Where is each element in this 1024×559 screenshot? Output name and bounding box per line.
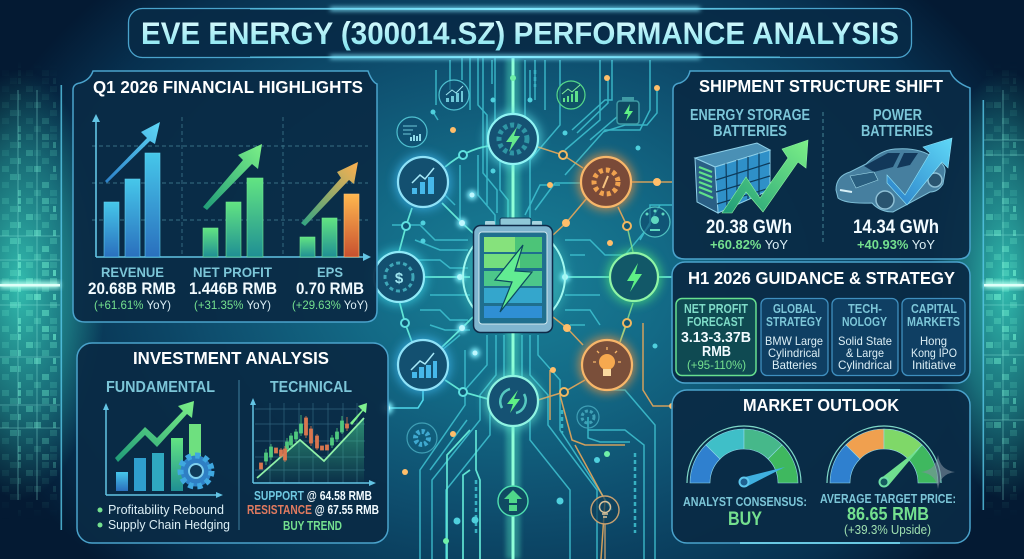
card: technology: & Large [846, 346, 884, 360]
card: net profit forecast: 3.13-3.37B [681, 330, 751, 346]
metric: revenue [88, 264, 176, 312]
label: power batteries: POWER [873, 107, 922, 124]
card: net profit forecast: RMB [702, 344, 731, 360]
label: energy storage batteries: BATTERIES [713, 123, 787, 140]
label: power batteries: BATTERIES [861, 123, 933, 140]
center node: upper-left growth chart [395, 154, 451, 210]
card: net profit forecast [676, 298, 756, 376]
heading: INVESTMENT ANALYSIS [133, 348, 329, 368]
label: analyst consensus [683, 495, 807, 530]
central vertical energy line [506, 58, 520, 559]
chart: grid and axes [92, 114, 371, 261]
panel: shipment structure shift [673, 71, 970, 259]
technical levels: SUPPORT @ 64.58 RMB [254, 489, 372, 503]
card: net profit forecast: (+95-110%) [687, 360, 746, 372]
background: right data strip [930, 60, 1024, 520]
metric: power batteries [853, 217, 939, 252]
junction dots [381, 75, 675, 544]
icon: report [397, 117, 427, 147]
center node: green bolt [607, 250, 661, 304]
subheading: fundamental: FUNDAMENTAL [106, 379, 215, 396]
center node: recycle bolt [485, 373, 541, 429]
technical levels: BUY TREND [283, 519, 342, 533]
center node: top energy gear [485, 111, 541, 167]
center node: orange gear [578, 154, 634, 210]
label: average target price: AVERAGE TARGET PRICE: [820, 492, 956, 506]
metric: revenue: 20.68B RMB [88, 279, 176, 298]
chart: fundamental growth [103, 401, 223, 498]
card: capital markets: Kong IPO [911, 346, 957, 360]
card: technology [832, 298, 898, 376]
center node: lower-left growth chart [395, 337, 451, 393]
card: capital markets [902, 298, 965, 376]
card: capital markets: CAPITAL [911, 302, 957, 316]
small icons around the circuit [397, 80, 670, 559]
card: capital markets: MARKETS [907, 315, 960, 329]
icon: ring gear [577, 406, 599, 428]
gauge: average target price [827, 426, 955, 489]
heading: H1 2026 GUIDANCE & STRATEGY [688, 268, 955, 288]
gauge: analyst consensus [687, 426, 801, 487]
bullet list: Supply Chain Hedging [108, 517, 230, 532]
icon: battery [617, 97, 639, 124]
card: capital markets: Initiative [912, 358, 956, 372]
icon: growth chart [439, 80, 469, 110]
label: average target price: (+39.3% Upside) [844, 523, 931, 537]
center node: light bulb [579, 337, 635, 393]
chart: technical candlestick [250, 398, 376, 486]
icon: green chart [557, 81, 585, 109]
background: left data strip [0, 60, 105, 530]
metric: revenue: (+61.61% YoY) [94, 298, 171, 312]
title bar: EVE ENERGY (300014.SZ) PERFORMANCE ANALYSIS [141, 15, 899, 51]
center node: dollar gear [371, 249, 427, 305]
card: technology: NOLOGY [842, 315, 888, 329]
label: average target price [820, 492, 956, 537]
bullet list [98, 502, 230, 532]
metric: power batteries: 14.34 GWh [853, 217, 939, 238]
metric: EPS: (+29.63% YoY) [292, 298, 368, 312]
card: global strategy: BMW Large [765, 334, 823, 348]
heading: Q1 2026 FINANCIAL HIGHLIGHTS [93, 77, 363, 97]
metric: net profit: (+31.35% YoY) [194, 298, 271, 312]
heading: MARKET OUTLOOK [743, 395, 899, 415]
sparkle mark [921, 455, 955, 489]
panel: H1 2026 guidance and strategy [672, 262, 970, 383]
technical levels [247, 489, 379, 533]
card: global strategy: STRATEGY [766, 315, 823, 329]
label: average target price: 86.65 RMB [847, 504, 929, 524]
metric: EPS [292, 264, 368, 312]
title bar [128, 8, 912, 58]
central battery [460, 218, 568, 332]
heading: SHIPMENT STRUCTURE SHIFT [699, 76, 943, 96]
icon: gear [407, 423, 437, 453]
icon: home arrow [498, 486, 528, 516]
center node: dollar gear: $ [395, 270, 404, 287]
central circuit traces [387, 58, 672, 559]
panel: Q1 2026 financial highlights [73, 71, 377, 322]
icon: electric car and blue arrow [836, 138, 952, 212]
bullet list: Profitability Rebound [108, 502, 224, 517]
card: global strategy: Cylindrical [768, 346, 820, 360]
card: technology: TECH- [848, 302, 882, 316]
card: global strategy [761, 298, 828, 376]
card: global strategy: GLOBAL [773, 302, 816, 316]
bar chart: EPS [300, 162, 359, 257]
metric: revenue: REVENUE [101, 264, 164, 280]
card: capital markets: Hong [920, 334, 947, 348]
label: analyst consensus: BUY [728, 509, 762, 530]
icon: storage container and green arrow [695, 140, 808, 213]
panel: market outlook [672, 390, 970, 543]
metric: energy storage [706, 217, 792, 252]
bar chart: revenue [104, 122, 160, 257]
card: net profit forecast: NET PROFIT [684, 302, 748, 316]
metric: energy storage: +60.82% YoY [710, 237, 788, 252]
metric: net profit: 1.446B RMB [189, 279, 277, 298]
label: energy storage batteries: ENERGY STORAGE [690, 107, 810, 124]
metric: energy storage: 20.38 GWh [706, 217, 792, 238]
bar chart: net profit [203, 144, 263, 257]
metric: EPS: EPS [317, 264, 343, 280]
icon: idea cluster [640, 207, 670, 237]
subheading: technical: TECHNICAL [270, 379, 352, 396]
card: technology: Cylindrical [838, 358, 892, 372]
icon: gear [180, 456, 212, 486]
icon: outline bulb [591, 496, 619, 559]
card: net profit forecast: FORECAST [687, 315, 744, 329]
technical levels: RESISTANCE @ 67.55 RMB [247, 503, 379, 517]
label: power batteries [861, 107, 933, 140]
metric: power batteries: +40.93% YoY [857, 237, 935, 252]
panel: investment analysis [77, 343, 388, 543]
metric: net profit: NET PROFIT [193, 264, 272, 280]
label: analyst consensus: ANALYST CONSENSUS: [683, 495, 807, 509]
label: energy storage batteries [690, 107, 810, 140]
card: technology: Solid State [838, 334, 892, 348]
metric: net profit [189, 264, 277, 312]
card: global strategy: Batteries [772, 358, 817, 372]
metric: EPS: 0.70 RMB [296, 279, 364, 298]
